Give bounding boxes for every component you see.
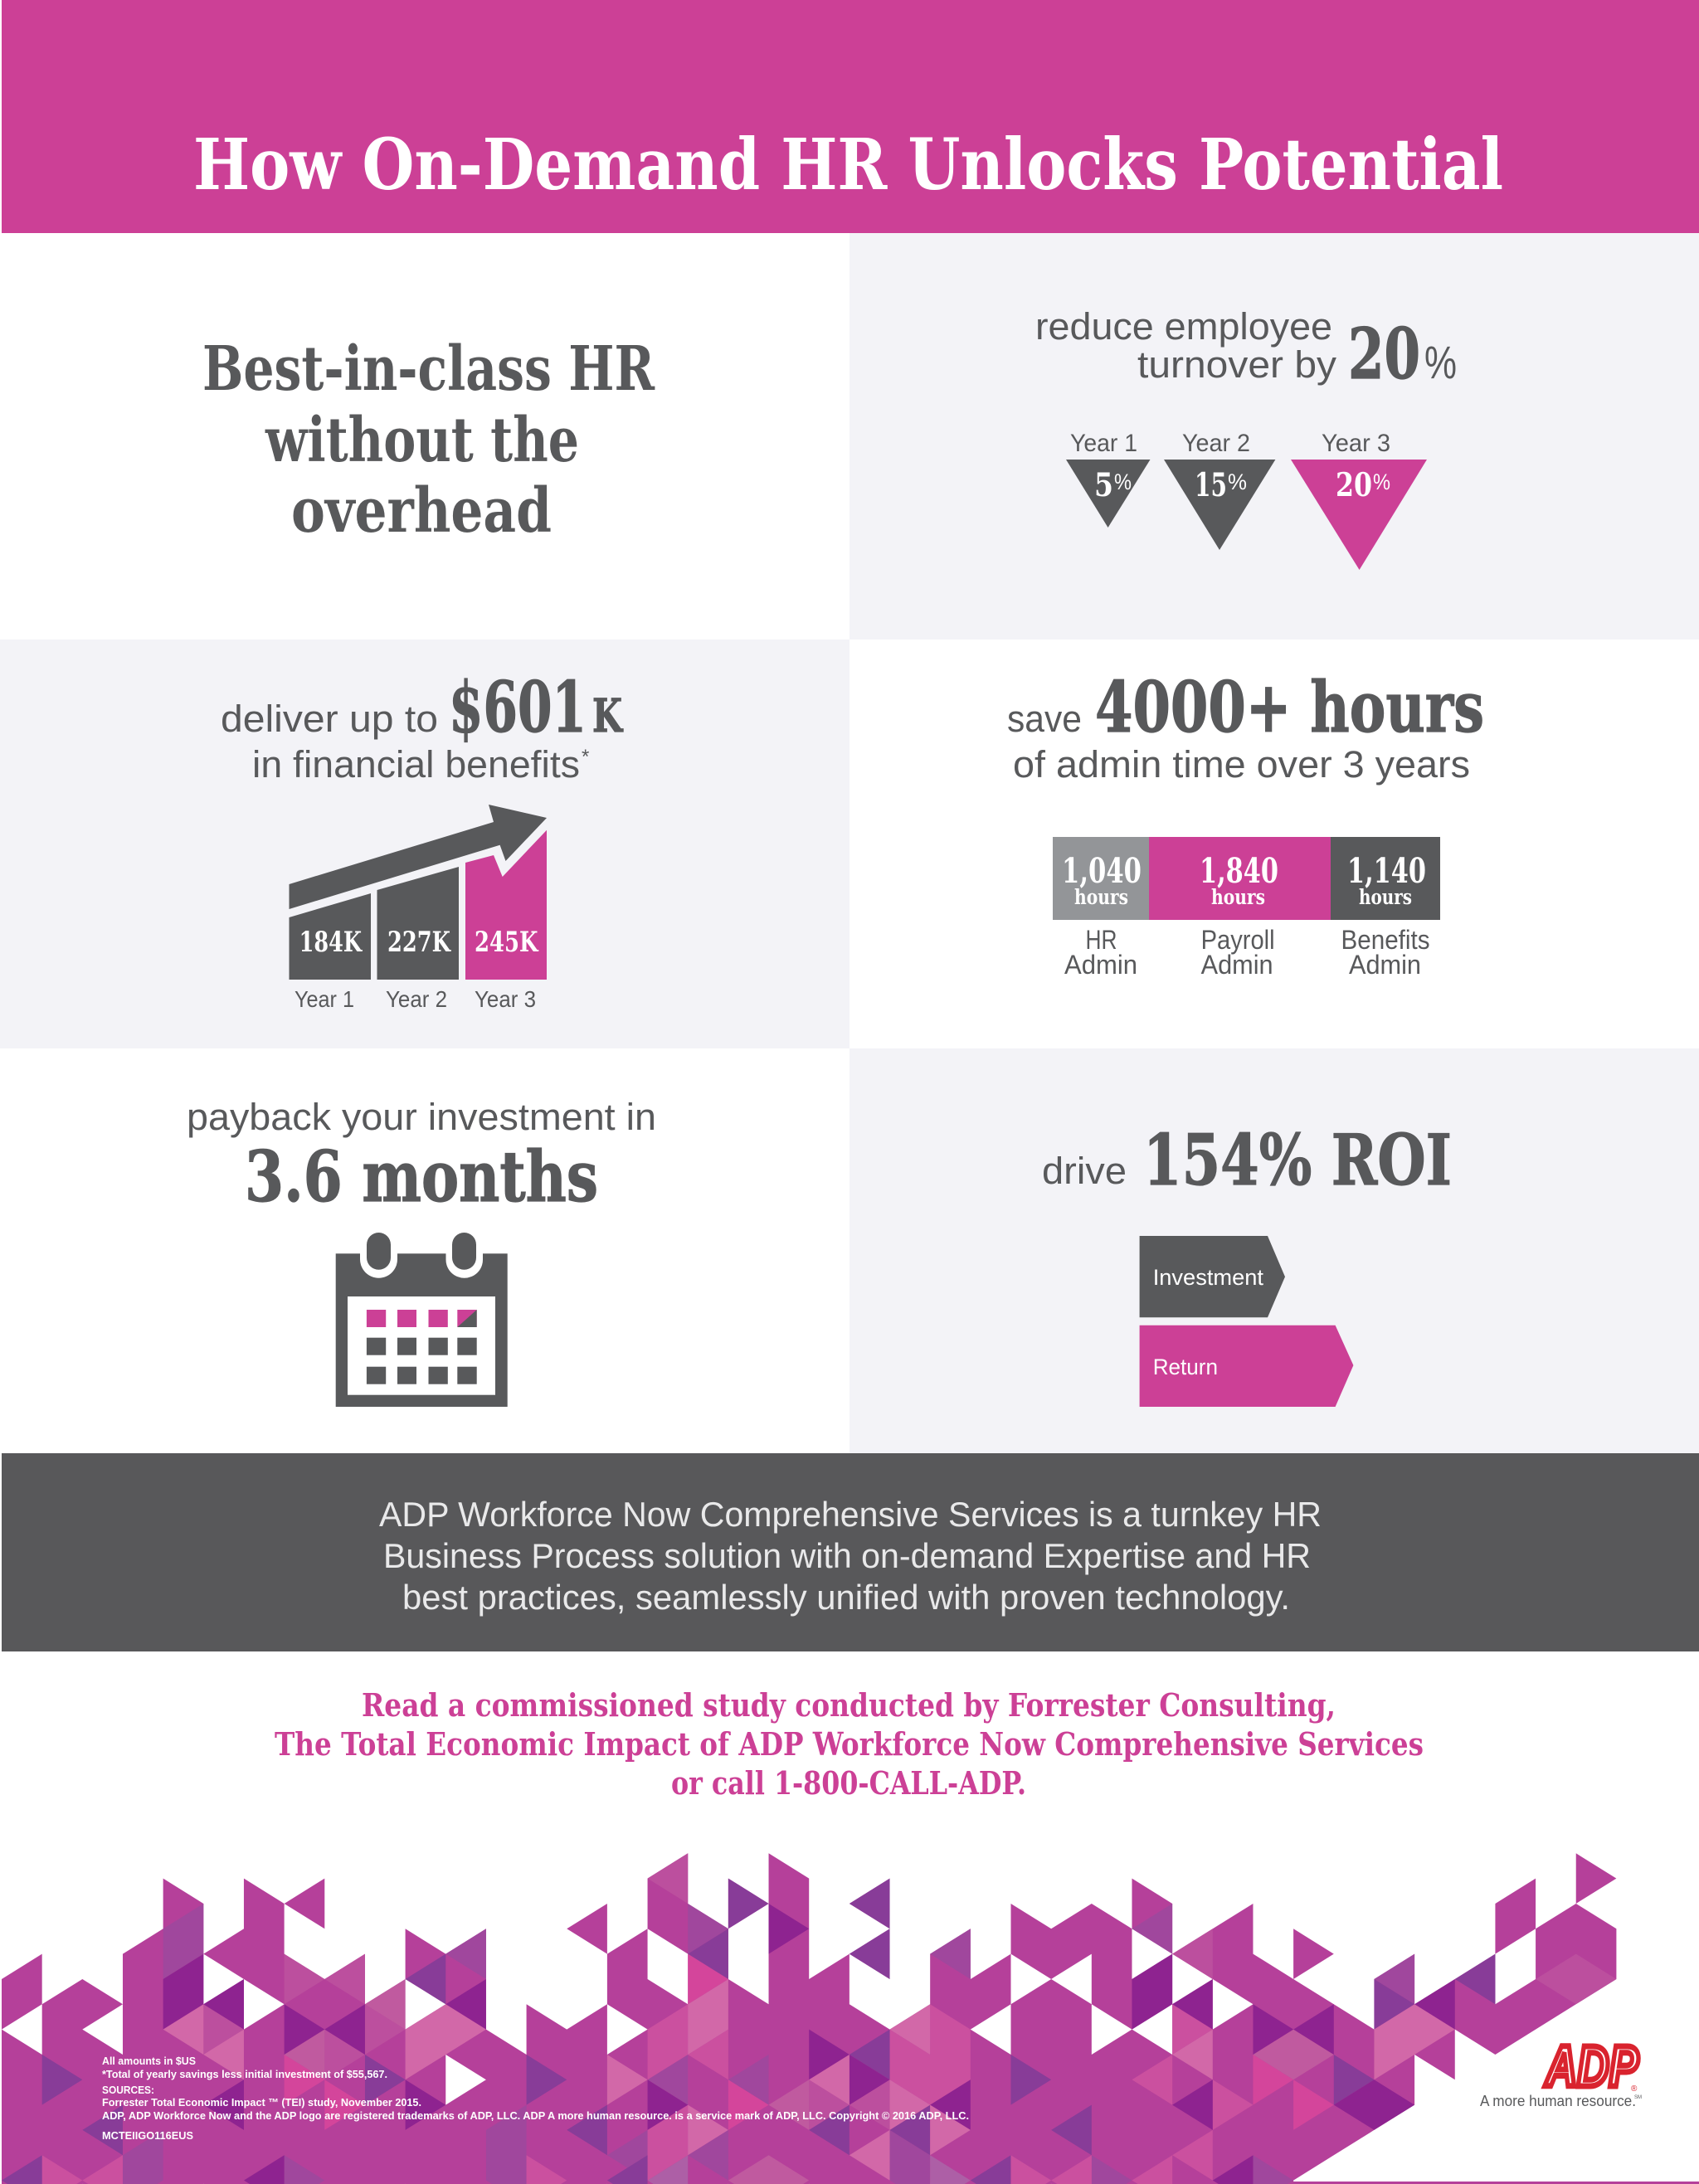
footnotes and sources: All amounts in $US	[102, 2055, 196, 2067]
turnover 20 percent figure: 20	[1348, 313, 1420, 395]
triangle year 3: 20 percent: 20	[1336, 466, 1372, 504]
panel: financial benefits	[0, 640, 850, 1048]
label: payroll admin: Admin	[1201, 950, 1273, 980]
panel: best-in-class heading	[0, 233, 850, 640]
bottom edge strip	[1293, 2182, 1699, 2184]
segment: HR admin hours: hours	[1074, 885, 1128, 909]
figure: 3.6 months: 3.6 months	[245, 1136, 598, 1218]
label: benefits admin	[1341, 925, 1430, 980]
label: HR admin	[1064, 925, 1137, 980]
triangle year 2: 15 percent	[1164, 460, 1275, 550]
description text: best practices, seamlessly unified with proven technology.	[402, 1578, 1290, 1617]
triangle year 2: 15 percent: 15	[1195, 466, 1227, 504]
logo wordmark: ADP	[1544, 2034, 1638, 2099]
caption: save: save	[1007, 698, 1082, 740]
call to action text: or call 1-800-CALL-ADP.	[671, 1764, 1026, 1802]
turnover caption line 1: reduce employee	[1035, 305, 1332, 348]
caption: payback: payback your investment in	[187, 1096, 656, 1138]
heading line 3: overhead	[291, 475, 552, 547]
segment: HR admin hours: 1,040	[1062, 851, 1142, 891]
header banner with title	[2, 0, 1699, 233]
description text	[379, 1495, 1322, 1617]
figure: 601K: K	[592, 688, 624, 742]
segment: payroll admin hours: 1,840	[1200, 851, 1278, 891]
footnote asterisk: *	[582, 746, 589, 768]
bar year 3	[465, 830, 547, 980]
turnover caption line 2: turnover by	[1137, 343, 1337, 386]
triangle year 2: 15 percent: %	[1228, 469, 1247, 494]
arrow: return: Return	[1153, 1355, 1218, 1379]
arrow: investment	[1140, 1236, 1285, 1317]
call to action text	[275, 1686, 1424, 1802]
tagline: A more human resource.	[1480, 2093, 1636, 2109]
growth bar chart	[289, 805, 547, 1012]
year labels: Year 1	[1070, 430, 1137, 457]
footnotes and sources: Forrester Total Economic Impact ™ (TEI) study, November 2015.	[102, 2096, 421, 2109]
segment: benefits admin hours: 1,140	[1347, 851, 1426, 891]
caption: admin time: of admin time over 3 years	[1013, 743, 1470, 786]
triangle year 3: 20 percent: %	[1373, 469, 1390, 494]
panel: hours saved	[850, 640, 1699, 1048]
footnotes and sources	[102, 2055, 969, 2142]
triangle year 3: 20 percent	[1291, 460, 1427, 570]
chart year labels: Year 1	[295, 986, 354, 1012]
description text: Business Process solution with on-demand Expertise and HR	[383, 1536, 1311, 1575]
triangle year 1: 5 percent: 5	[1094, 466, 1113, 504]
registered mark: ®	[1631, 2084, 1638, 2094]
segment: HR admin hours	[1053, 837, 1149, 920]
service mark: SM	[1634, 2095, 1642, 2100]
caption: deliver up to: deliver up to	[221, 698, 438, 740]
panel: return on investment	[850, 1048, 1699, 1453]
chart year labels: Year 3	[475, 986, 536, 1012]
segment: payroll admin hours	[1149, 837, 1331, 920]
panel: payback period	[0, 1048, 850, 1453]
year labels: Year 3	[1322, 430, 1390, 457]
year labels: Year 2	[1182, 430, 1250, 457]
bar year 1: 184K	[299, 926, 363, 959]
turnover 20 percent figure: %	[1424, 336, 1457, 388]
caption: in financial benefits: in financial benefits	[252, 743, 580, 786]
call to action text: Read a commissioned study conducted by Forrester Consulting,	[362, 1686, 1336, 1724]
footnotes and sources: MCTEIIGO116EUS	[102, 2129, 193, 2142]
label: payroll admin	[1201, 925, 1275, 980]
label: benefits admin: Admin	[1349, 950, 1421, 980]
chart year labels: Year 2	[386, 986, 447, 1012]
segment: payroll admin hours: hours	[1211, 885, 1265, 909]
triangle year 1: 5 percent	[1066, 460, 1150, 528]
label: HR admin: HR	[1085, 925, 1117, 955]
icon: calendar	[336, 1228, 508, 1407]
panel: reduce employee turnover	[850, 233, 1699, 640]
chart year labels	[295, 986, 536, 1012]
call to action text: The Total Economic Impact of ADP Workforce Now Comprehensive Services	[275, 1725, 1424, 1763]
footnotes and sources: *Total of yearly savings less initial investment of $55,567.	[102, 2068, 387, 2080]
caption: drive: drive	[1042, 1150, 1127, 1192]
label: benefits admin: Benefits	[1341, 925, 1430, 955]
segment: benefits admin hours	[1331, 837, 1440, 920]
bar year 3: 245K	[475, 926, 539, 959]
arrow: return	[1140, 1325, 1353, 1407]
figure: 601K: $601	[449, 666, 587, 748]
year labels	[1070, 430, 1390, 457]
geometric triangle mosaic	[2, 1853, 1616, 2184]
footnotes and sources: ADP, ADP Workforce Now and the ADP logo are registered trademarks of ADP, LLC. ADP A more human resource. is a service mark of ADP, LLC. Copyright © 2016 ADP, LLC.	[102, 2109, 969, 2122]
bar year 1	[289, 893, 371, 980]
ADP logo and tagline	[1480, 2034, 1642, 2109]
description text: ADP Workforce Now Comprehensive Services is a turnkey HR	[379, 1495, 1322, 1534]
figure: 154% ROI: 154% ROI	[1143, 1119, 1452, 1201]
bar year 2: 227K	[387, 926, 451, 959]
label: payroll admin: Payroll	[1201, 925, 1275, 955]
arrow: investment: Investment	[1153, 1265, 1264, 1290]
growth arrow	[289, 805, 547, 909]
title: How On-Demand HR Unlocks Potential	[193, 124, 1503, 207]
figure: 4000+ hours: 4000+ hours	[1095, 666, 1484, 748]
heading line 1: Best-in-class HR	[202, 333, 655, 405]
segment: benefits admin hours: hours	[1359, 885, 1412, 909]
panel: dark description band	[2, 1453, 1699, 1651]
triangle year 1: 5 percent: %	[1114, 469, 1132, 494]
label: HR admin: Admin	[1064, 950, 1137, 980]
bar year 2	[377, 867, 459, 980]
heading line 2: without the	[265, 405, 579, 476]
footnotes and sources: SOURCES:	[102, 2084, 154, 2096]
